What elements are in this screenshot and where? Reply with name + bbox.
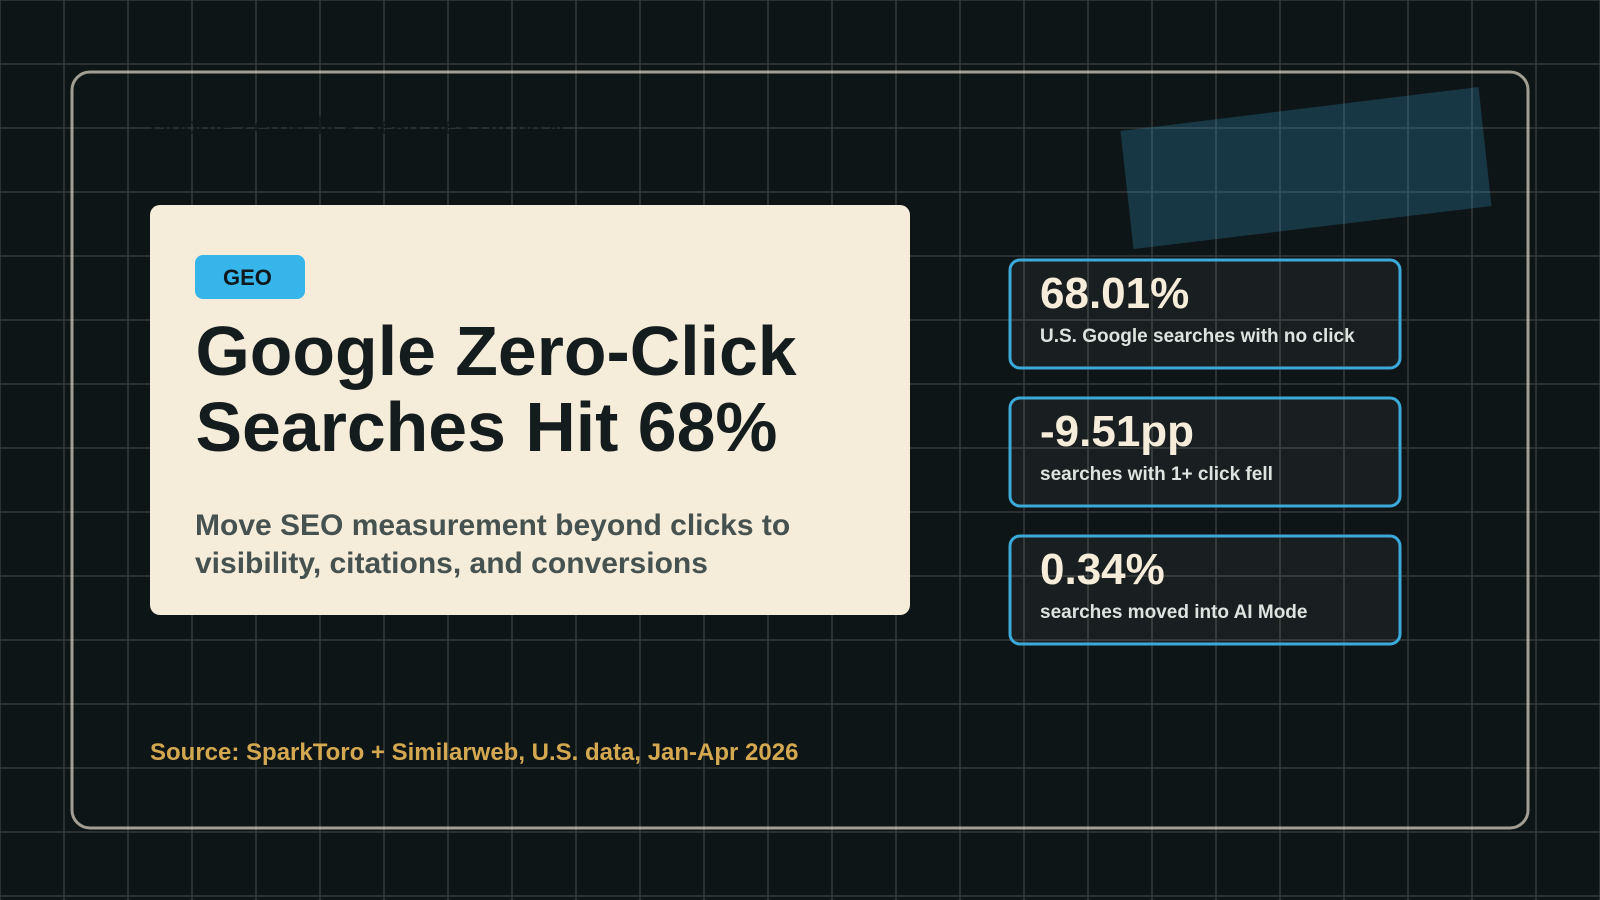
title: Searches Hit 68% <box>196 388 777 466</box>
faint hidden heading: Google Zero-Click Searches Hit 68% <box>150 113 563 140</box>
subtitle: Move SEO measurement beyond clicks to <box>195 509 790 542</box>
stat card: -9.51pp: -9.51pp <box>1040 407 1194 456</box>
stat card: 68.01%: U.S. Google searches with no click <box>1040 326 1355 347</box>
stat card: 0.34% <box>1010 536 1400 644</box>
stat card: 68.01% <box>1010 260 1400 368</box>
decorative tilted blue block <box>1120 87 1492 249</box>
subtitle: visibility, citations, and conversions <box>195 547 708 580</box>
stat card: 68.01%: 68.01% <box>1040 269 1189 318</box>
stat card: -9.51pp: searches with 1+ click fell <box>1040 464 1273 485</box>
panel: headline card <box>150 205 910 615</box>
title: Google Zero-Click <box>196 312 797 390</box>
stat card: 0.34%: 0.34% <box>1040 545 1165 594</box>
badge: GEO: GEO <box>223 265 272 290</box>
badge: GEO <box>195 255 305 299</box>
outer frame <box>72 72 1528 828</box>
stat card: -9.51pp <box>1010 398 1400 506</box>
source line: Source: SparkToro + Similarweb, U.S. data, Jan-Apr 2026 <box>150 739 798 766</box>
stat card: 0.34%: searches moved into AI Mode <box>1040 602 1307 623</box>
